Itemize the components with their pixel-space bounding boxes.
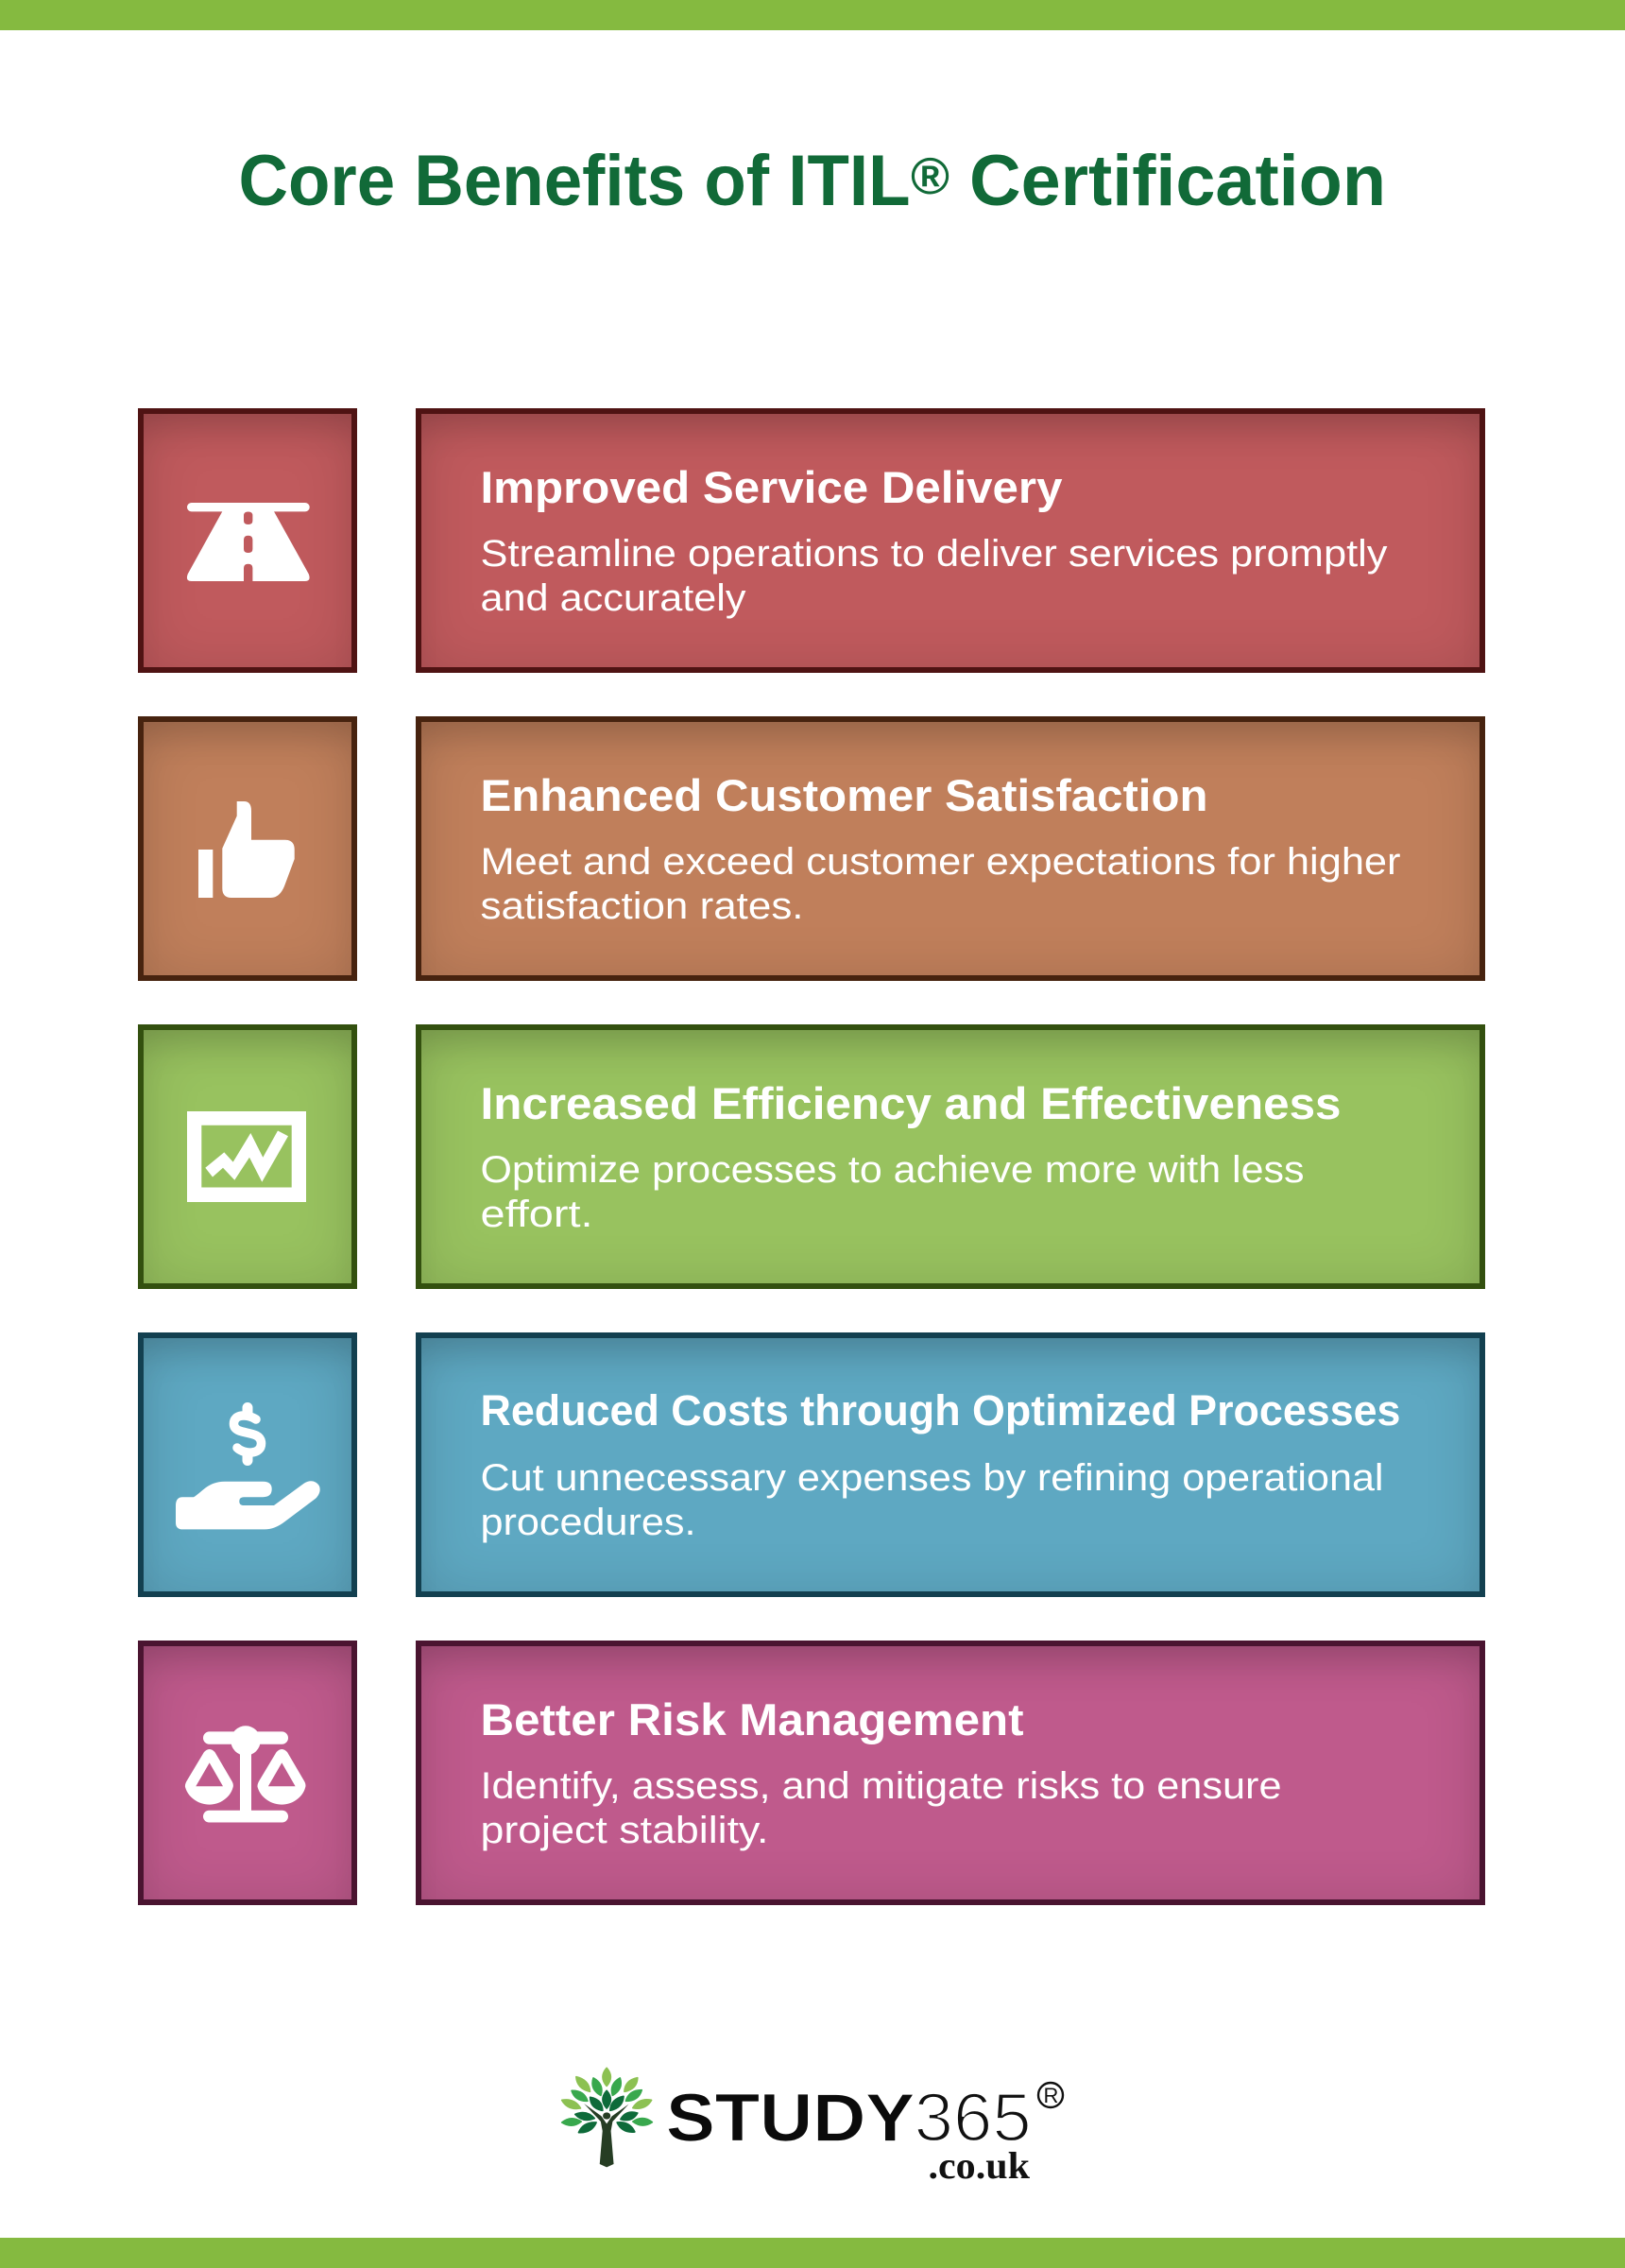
description (480, 1457, 1383, 1543)
wordmark (666, 2081, 1063, 2187)
title (238, 141, 1386, 221)
description: Cut unnecessary expenses by refining operational (480, 1457, 1383, 1499)
description: Identify, assess, and mitigate risks to ensure (480, 1765, 1281, 1807)
panel: icon tile, risk management (138, 1641, 357, 1905)
heading: Improved Service Delivery (480, 462, 1062, 512)
description (480, 1149, 1304, 1235)
panel: icon tile, service delivery (138, 408, 357, 673)
heading: Better Risk Management (480, 1694, 1024, 1744)
icon: road (187, 503, 310, 581)
heading: Reduced Costs through Optimized Processes (480, 1386, 1400, 1435)
icon: chart (187, 1111, 306, 1202)
wordmark: 365 (915, 2081, 1032, 2156)
description: procedures. (480, 1502, 695, 1543)
title: ® (911, 146, 949, 205)
bottom green bar (0, 2238, 1625, 2268)
panel: text, improved service delivery (416, 408, 1485, 673)
heading: Enhanced Customer Satisfaction (480, 770, 1207, 820)
wordmark: R (1043, 2084, 1058, 2107)
description (480, 1765, 1281, 1851)
title: Core Benefits of ITIL (238, 141, 911, 221)
description: project stability. (480, 1810, 769, 1851)
description: satisfaction rates. (480, 885, 803, 927)
wordmark: .co.uk (928, 2144, 1031, 2187)
description: effort. (480, 1194, 593, 1235)
logo: Study365 (561, 2068, 1064, 2187)
description: Meet and exceed customer expectations for higher (480, 841, 1400, 883)
panel: text, better risk management (416, 1641, 1485, 1905)
description: Optimize processes to achieve more with less (480, 1149, 1304, 1191)
wordmark: STUDY (666, 2081, 915, 2156)
icon: tree (562, 2068, 652, 2167)
icon: thumbs up (198, 801, 295, 898)
description: Streamline operations to deliver services promptly (480, 533, 1387, 575)
description: and accurately (480, 577, 746, 619)
panel: text, increased efficiency (416, 1024, 1485, 1289)
title: Certification (969, 141, 1386, 221)
panel: icon tile, reduced costs (138, 1332, 357, 1597)
panel: icon tile, customer satisfaction (138, 716, 357, 981)
top green bar (0, 0, 1625, 30)
icon: balance scales (185, 1726, 306, 1822)
panel: text, reduced costs (416, 1332, 1485, 1597)
description (480, 841, 1400, 927)
panel: text, enhanced customer satisfaction (416, 716, 1485, 981)
heading: Increased Efficiency and Effectiveness (480, 1078, 1342, 1128)
description (480, 533, 1387, 619)
icon: hand with dollar (176, 1402, 320, 1529)
panel: icon tile, efficiency (138, 1024, 357, 1289)
